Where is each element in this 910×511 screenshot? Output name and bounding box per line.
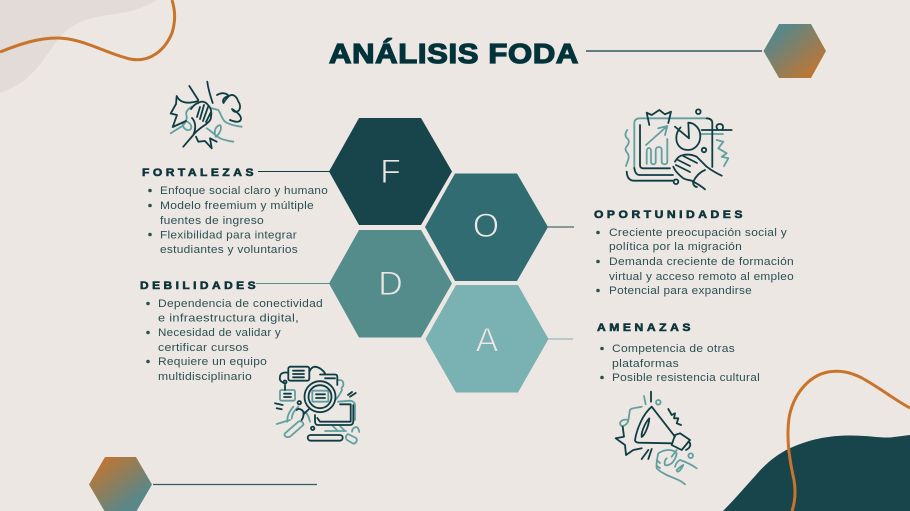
list: debilidades: e infraestructura digital, bbox=[158, 312, 299, 324]
title connector line bbox=[586, 50, 762, 52]
list: fortalezas: Flexibilidad para integrar bbox=[160, 230, 297, 242]
background blob: top left bbox=[0, 0, 157, 93]
list: debilidades: certificar cursos bbox=[158, 342, 249, 354]
connector: fortalezas bbox=[258, 170, 330, 172]
hexagon F bbox=[329, 118, 452, 225]
list: amenazas: Posible resistencia cultural bbox=[612, 372, 760, 384]
connector: oportunidades bbox=[547, 226, 574, 228]
list: oportunidades: Creciente preocupación social y bbox=[609, 227, 787, 239]
panel: oportunidades bbox=[594, 209, 794, 297]
list: debilidades: Requiere un equipo bbox=[158, 356, 267, 368]
list: fortalezas: Modelo freemium y múltiple bbox=[160, 200, 314, 212]
hexagon A: A bbox=[476, 322, 499, 360]
hexagon D: D bbox=[378, 265, 403, 303]
background blob: bottom right bbox=[723, 435, 910, 511]
list: amenazas: plataformas bbox=[612, 358, 679, 370]
icon: chart presentation bbox=[625, 109, 732, 189]
decorative hexagon: top right bbox=[764, 24, 826, 78]
hexagon O: O bbox=[473, 207, 499, 245]
list: debilidades bbox=[146, 298, 323, 383]
list: debilidades: multidisciplinario bbox=[158, 371, 252, 383]
list: fortalezas: fuentes de ingreso bbox=[160, 215, 264, 227]
list: oportunidades bbox=[596, 227, 794, 297]
decorative line: bottom left bbox=[153, 484, 317, 486]
orange curve: bottom right bbox=[788, 371, 910, 511]
list: debilidades: Necesidad de validar y bbox=[158, 327, 281, 339]
hexagon D bbox=[329, 230, 452, 338]
list: oportunidades: Potencial para expandirse bbox=[609, 285, 752, 297]
decorative hexagon: bottom left bbox=[89, 457, 152, 511]
panel: fortalezas bbox=[142, 167, 328, 256]
list: amenazas: Competencia de otras bbox=[612, 343, 735, 355]
hexagon O bbox=[425, 174, 548, 281]
icon: megaphone bbox=[616, 392, 697, 484]
heading: debilidades: DEBILIDADES bbox=[140, 280, 259, 292]
connector: debilidades bbox=[256, 282, 330, 284]
hexagon A bbox=[426, 285, 548, 392]
orange curve: top left bbox=[0, 0, 175, 60]
heading: oportunidades: OPORTUNIDADES bbox=[594, 209, 746, 221]
hexagon F: F bbox=[380, 153, 401, 191]
connector: amenazas bbox=[548, 338, 573, 340]
icon: search and monitor bbox=[275, 367, 359, 444]
heading: amenazas: AMENAZAS bbox=[597, 322, 694, 334]
list: fortalezas bbox=[148, 185, 328, 256]
panel: debilidades bbox=[140, 280, 323, 383]
title: ANÁLISIS FODA bbox=[329, 38, 579, 69]
list: oportunidades: Demanda creciente de formación bbox=[609, 256, 794, 268]
list: amenazas bbox=[600, 343, 760, 384]
list: fortalezas: estudiantes y voluntarios bbox=[160, 244, 298, 256]
heading: fortalezas: FORTALEZAS bbox=[142, 167, 257, 179]
list: debilidades: Dependencia de conectividad bbox=[158, 298, 323, 310]
list: fortalezas: Enfoque social claro y humano bbox=[160, 185, 328, 197]
list: oportunidades: virtual y acceso remoto al empleo bbox=[609, 271, 794, 283]
icon: joined hands bbox=[171, 82, 242, 148]
list: oportunidades: política por la migración bbox=[609, 241, 742, 253]
panel: amenazas bbox=[597, 322, 760, 384]
